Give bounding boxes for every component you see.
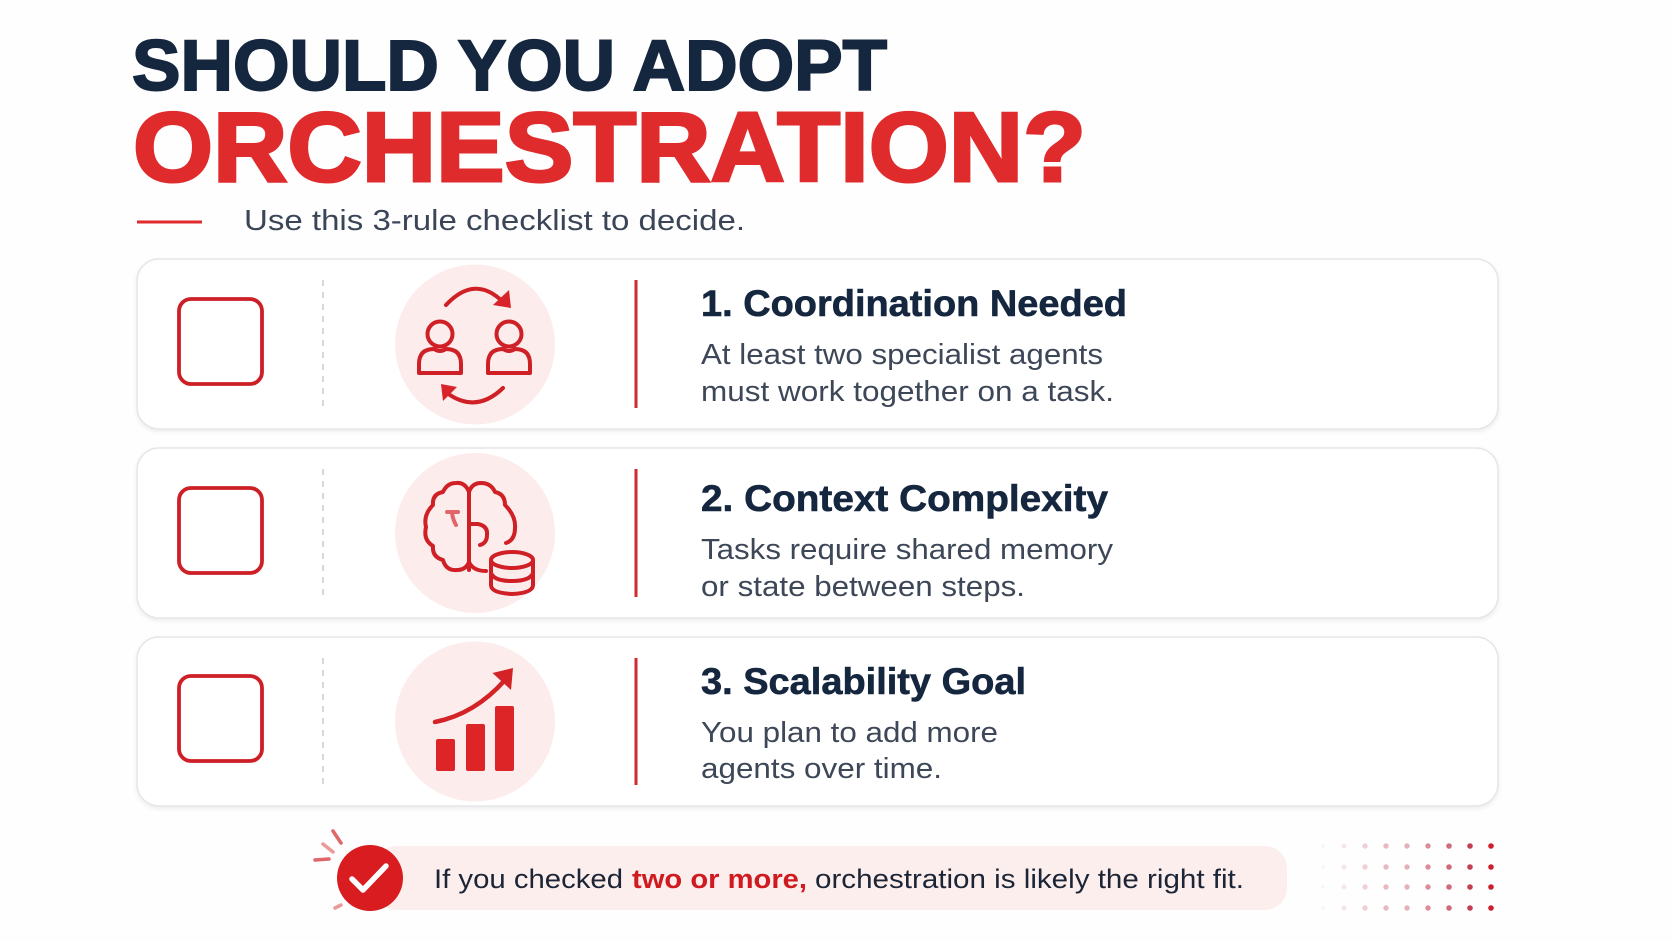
rule 2 heading: 2. Context Complexity [701, 478, 1108, 519]
rule 1 heading: 1. Coordination Needed [701, 283, 1127, 324]
callout text: If you checked [434, 864, 623, 894]
title [132, 27, 1086, 202]
rule 2 description: or state between steps. [701, 571, 1025, 603]
rule 1 description [701, 339, 1114, 408]
rule 1 description: must work together on a task. [701, 376, 1114, 408]
callout text: two or more, [632, 864, 807, 894]
panel: rule 2 context complexity [137, 448, 1498, 618]
subtitle: Use this 3-rule checklist to decide. [244, 205, 745, 237]
rule 2 description: Tasks require shared memory [701, 534, 1114, 566]
rule 3 description: agents over time. [701, 753, 942, 785]
icon: two agents exchanging [395, 264, 555, 424]
checkbox 2 [179, 488, 262, 573]
icon: growth chart [395, 642, 555, 802]
rule 3 description [701, 717, 998, 785]
icon: brain with database [395, 453, 555, 613]
subtitle accent line [137, 220, 202, 224]
panel: rule 1 coordination needed [137, 259, 1498, 429]
checkbox 1 [179, 299, 262, 384]
callout: conclusion [315, 831, 1287, 911]
checkbox 3 [179, 676, 262, 761]
dot pattern [1321, 843, 1494, 911]
rule 1 description: At least two specialist agents [701, 339, 1103, 371]
title: ORCHESTRATION? [133, 92, 1086, 202]
icon: check badge [315, 831, 403, 911]
title: SHOULD YOU ADOPT [132, 27, 887, 106]
panel: rule 3 scalability goal [137, 637, 1498, 806]
callout text: orchestration is likely the right fit. [815, 864, 1244, 894]
rule 2 description [701, 534, 1114, 603]
rule 3 heading: 3. Scalability Goal [701, 661, 1026, 702]
rule 3 description: You plan to add more [701, 717, 998, 749]
